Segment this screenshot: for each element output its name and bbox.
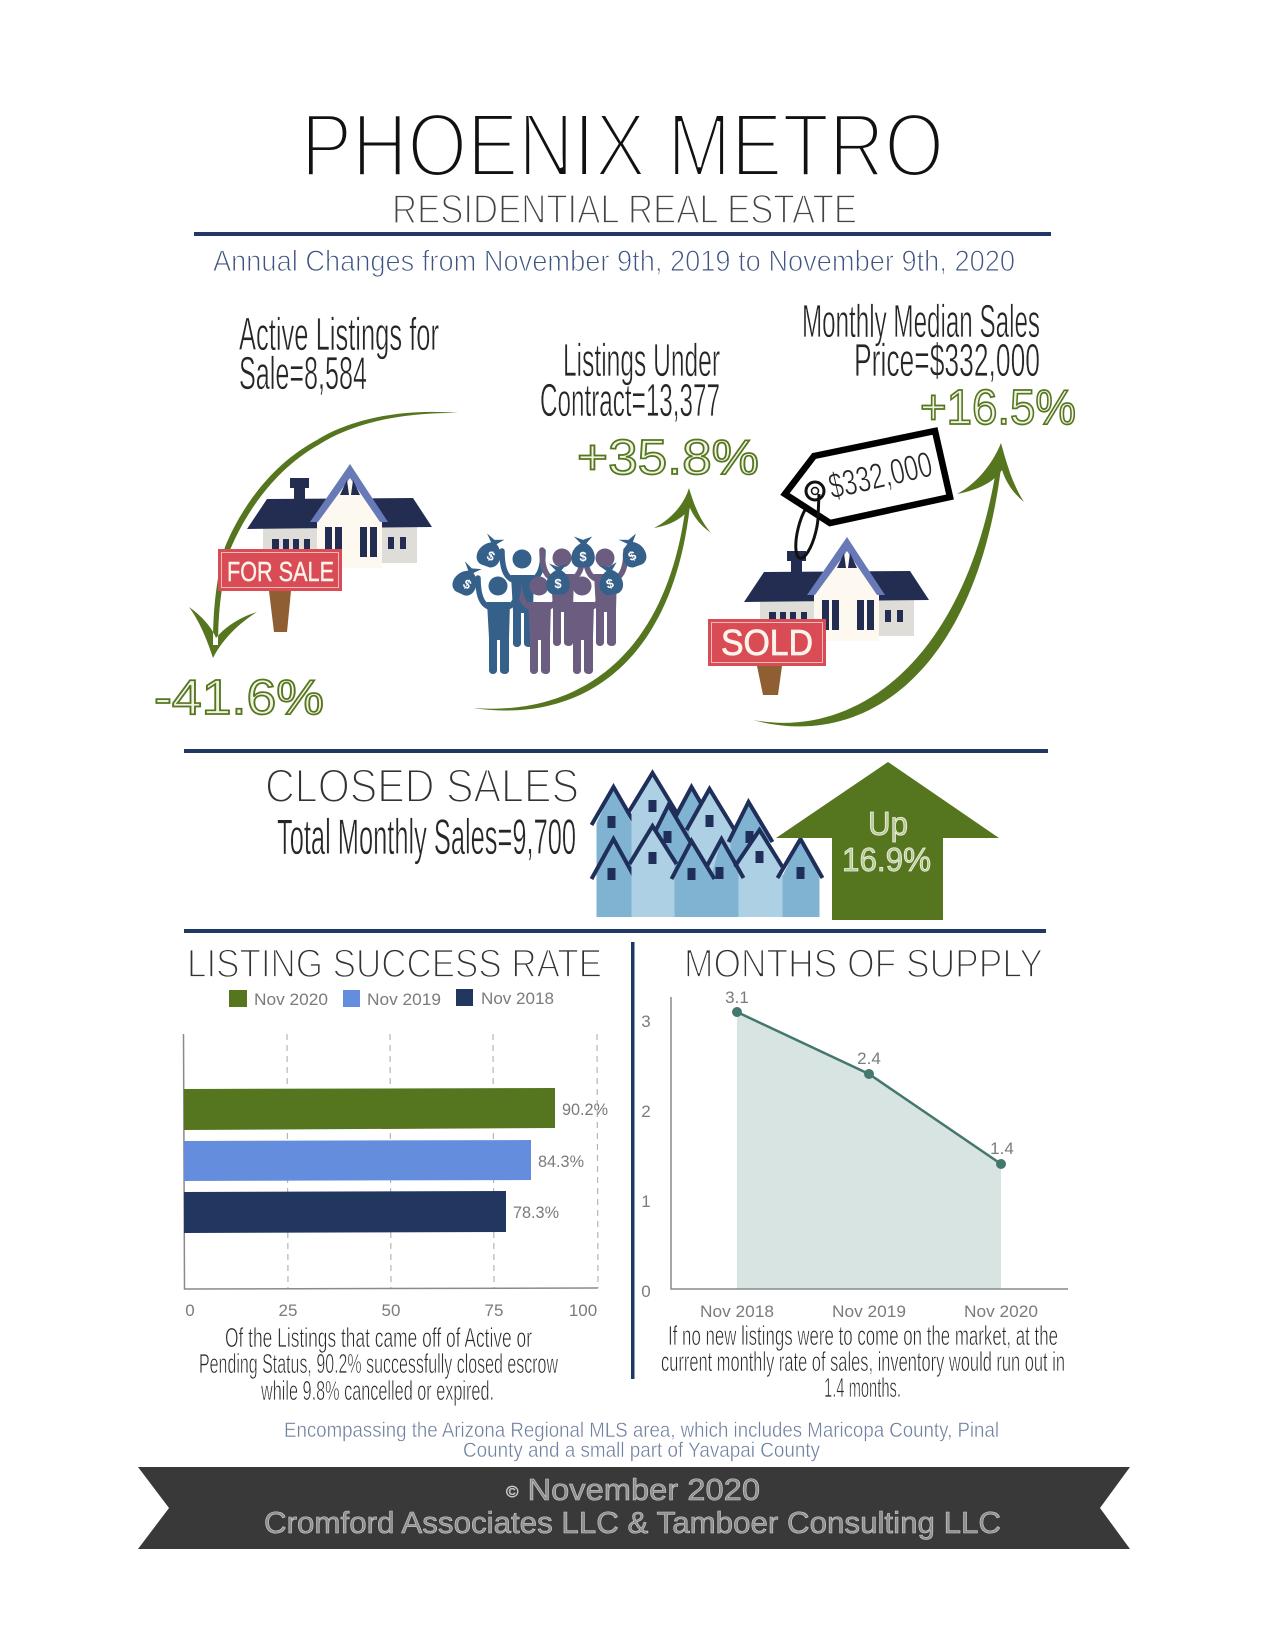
label: median price: Price=$332,000 <box>854 334 1040 386</box>
bar chart <box>184 1034 608 1320</box>
bar chart: 75 <box>485 1301 503 1320</box>
label: active listings <box>239 308 439 399</box>
bar chart: 84.3% <box>538 1152 584 1171</box>
title: PHOENIX METRO <box>301 96 944 196</box>
area line chart <box>641 988 1068 1321</box>
subtitle: RESIDENTIAL REAL ESTATE <box>392 186 857 232</box>
caption: Of the Listings that came off of Active or <box>225 1322 532 1353</box>
footer ribbon: Cromford Associates LLC & Tamboer Consulting LLC <box>264 1505 1001 1540</box>
icon: people with money bags <box>450 533 649 674</box>
arrow: up 16.9 percent: Up <box>868 805 908 842</box>
footnote: coverage area <box>284 1419 999 1462</box>
arrow: up <box>753 443 1024 726</box>
icon: sold house <box>744 537 929 641</box>
footer ribbon: © <box>506 1484 519 1501</box>
area line chart: Nov 2018 <box>700 1302 774 1321</box>
area line chart: Nov 2019 <box>832 1302 906 1321</box>
label: under contract: Contract=13,377 <box>540 374 720 426</box>
legend <box>229 989 554 1009</box>
area line chart: Nov 2020 <box>964 1302 1038 1321</box>
stat: plus 35.8 percent: +35.8% <box>577 431 759 485</box>
legend: Nov 2018 <box>481 989 554 1008</box>
bar chart: 100 <box>569 1301 597 1320</box>
bar chart: 78.3% <box>513 1203 559 1222</box>
arrow: up 16.9 percent: 16.9% <box>842 841 931 878</box>
icon: people with money bags: $ <box>554 576 562 591</box>
bar chart: 90.2% <box>562 1100 608 1119</box>
label: median price: Monthly Median Sales <box>802 295 1040 347</box>
panel: months of supply <box>641 942 1068 1403</box>
panel: median sales price <box>708 295 1076 726</box>
label: under contract: Listings Under <box>563 334 720 386</box>
footer ribbon <box>138 1467 1130 1549</box>
icon: sold sign: SOLD <box>721 622 813 663</box>
caption <box>199 1322 558 1406</box>
icon: people with money bags: $ <box>604 575 616 592</box>
footnote: coverage area: Encompassing the Arizona Regional MLS area, which includes Maricopa County, Pinal <box>284 1419 999 1442</box>
label: median price <box>802 295 1040 386</box>
panel: listings under contract <box>450 334 759 711</box>
heading: LISTING SUCCESS RATE <box>187 942 602 986</box>
footer ribbon: November 2020 <box>518 1472 760 1507</box>
caption: Pending Status, 90.2% successfully closed escrow <box>199 1348 558 1379</box>
label: total monthly sales: Total Monthly Sales=9,700 <box>277 809 576 865</box>
icon: cluster of houses <box>592 773 822 917</box>
area line chart: 1.4 <box>990 1139 1014 1158</box>
bar chart: 50 <box>382 1301 400 1320</box>
area line chart: 3.1 <box>725 988 749 1007</box>
bar chart: 25 <box>279 1301 297 1320</box>
stat: minus 41.6 percent: -41.6% <box>154 671 324 725</box>
label: active listings: Sale=8,584 <box>239 347 367 399</box>
footnote: coverage area: County and a small part of Yavapai County <box>463 1439 820 1462</box>
arrow: up 16.9 percent <box>776 762 999 920</box>
icon: sold sign <box>708 619 826 695</box>
icon: people with money bags: $ <box>484 548 498 565</box>
heading: closed sales: CLOSED SALES <box>265 759 579 812</box>
area line chart: 0 <box>641 1282 651 1301</box>
arrow: up <box>473 488 711 711</box>
caption: 1.4 months. <box>824 1372 901 1403</box>
icon: people with money bags: $ <box>460 576 475 593</box>
area line chart: 1 <box>641 1192 651 1211</box>
icon: for sale sign: FOR SALE <box>227 556 334 587</box>
icon: price tag: $332,000 <box>825 443 936 507</box>
label: under contract <box>540 334 720 426</box>
icon: price tag <box>785 431 950 560</box>
bar chart: 0 <box>185 1301 195 1320</box>
arrow: down <box>189 412 458 658</box>
heading: MONTHS OF SUPPLY <box>684 942 1043 986</box>
area line chart: 2 <box>641 1102 651 1121</box>
panel: listing success rate <box>184 942 608 1406</box>
label: active listings: Active Listings for <box>239 308 439 360</box>
icon: people with money bags: $ <box>579 549 587 564</box>
panel: active listings <box>154 308 458 725</box>
icon: for sale sign <box>218 549 342 632</box>
caption <box>661 1320 1065 1403</box>
caption: while 9.8% cancelled or expired. <box>260 1375 494 1406</box>
icon: people with money bags: $ <box>626 547 639 564</box>
stat: plus 16.5 percent: +16.5% <box>920 381 1076 435</box>
date range: Annual Changes from November 9th, 2019 to November 9th, 2020 <box>213 245 1015 278</box>
legend: Nov 2019 <box>367 990 441 1009</box>
legend: Nov 2020 <box>254 990 328 1009</box>
area line chart: 2.4 <box>857 1049 881 1068</box>
area line chart: 3 <box>641 1012 651 1031</box>
icon: house for sale <box>247 464 432 568</box>
